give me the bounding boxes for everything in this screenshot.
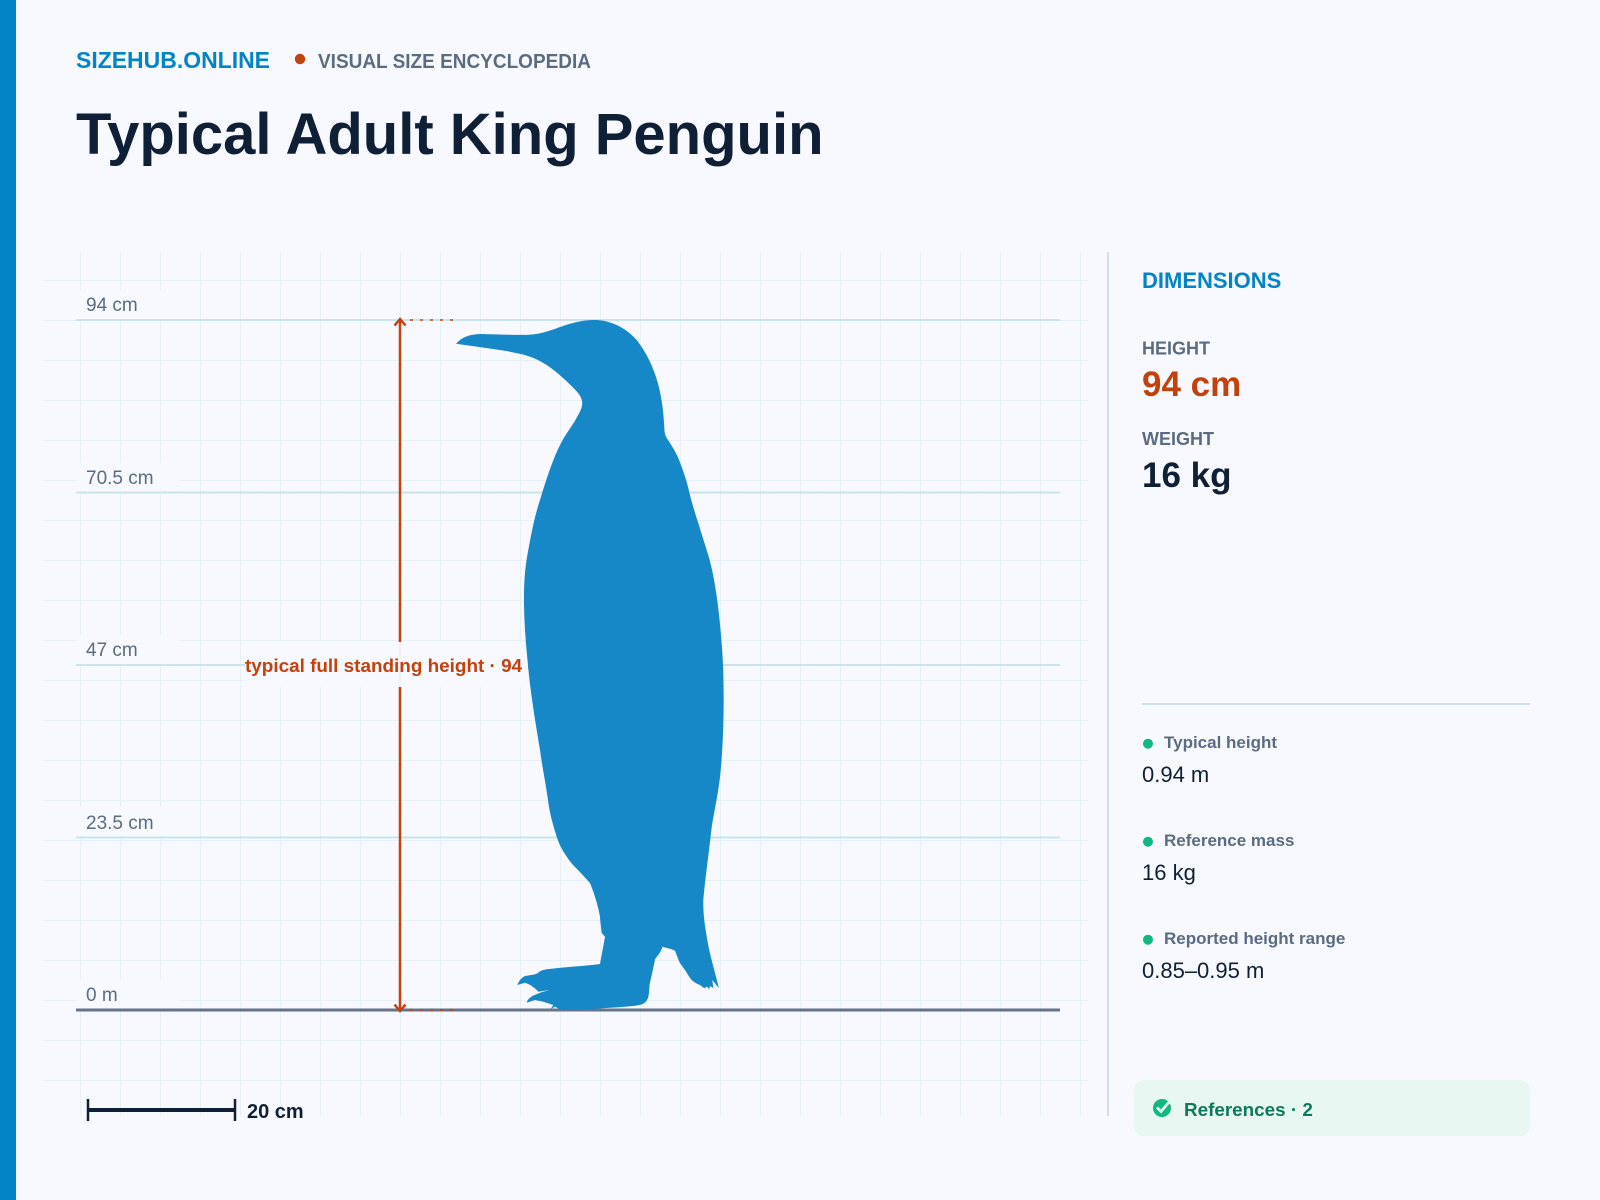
height stat: HEIGHT (1142, 338, 1210, 358)
height reference lines (76, 320, 1060, 838)
scale bar: 20 cm: 20 cm (247, 1101, 304, 1123)
penguin silhouette (456, 320, 724, 1010)
title: Typical Adult King Penguin (76, 102, 824, 167)
weight stat: 16 kg (1142, 456, 1232, 495)
tick label: 47 cm (76, 635, 180, 664)
panel separator (1142, 703, 1530, 705)
tick label: 70.5 cm (76, 462, 180, 492)
panel: dimensions (1142, 268, 1281, 495)
header: brand line: VISUAL SIZE ENCYCLOPEDIA (318, 51, 591, 73)
fact: reported height range: Reported height range (1164, 929, 1345, 948)
tick label: 47 cm: 47 cm (86, 640, 138, 661)
references badge: References · 2 (1184, 1099, 1313, 1120)
icon: check circle (1153, 1099, 1171, 1117)
header: brand line: SIZEHUB.ONLINE (76, 47, 270, 73)
height callout label: typical full standing height · 94 cm (245, 656, 555, 677)
fact: typical height: Typical height (1164, 733, 1277, 752)
fact: reference mass: Reference mass (1164, 831, 1294, 850)
dimensions heading: DIMENSIONS (1142, 268, 1281, 293)
chart: height scale (76, 290, 1060, 1010)
fact: reference mass: 16 kg (1142, 860, 1196, 885)
weight stat: WEIGHT (1142, 429, 1214, 449)
tick label: 94 cm (76, 290, 180, 319)
tick label: 70.5 cm: 70.5 cm (86, 468, 154, 489)
fact: reference mass (1142, 831, 1294, 885)
fact: reported height range: 0.85–0.95 m (1142, 958, 1264, 983)
accent bar (0, 0, 16, 1200)
ground line (76, 1008, 1060, 1012)
height callout label (245, 642, 555, 687)
fact: typical height: 0.94 m (1142, 762, 1209, 787)
references badge (1134, 1080, 1530, 1136)
tick label: 0 m: 0 m (86, 985, 118, 1006)
fact: typical height (1142, 733, 1277, 787)
header: brand line (76, 47, 591, 73)
tick label: 23.5 cm: 23.5 cm (86, 813, 154, 834)
side panel divider (1107, 252, 1109, 1116)
height dimension arrow (394, 319, 456, 1011)
weight stat (1142, 429, 1232, 495)
height stat (1142, 338, 1241, 404)
height stat: 94 cm (1142, 365, 1241, 404)
panel: key facts (1142, 733, 1345, 983)
tick label: 94 cm: 94 cm (86, 295, 138, 316)
fact: reported height range (1142, 929, 1345, 983)
tick label: 0 m (76, 980, 180, 1008)
tick label: 23.5 cm (76, 807, 180, 836)
